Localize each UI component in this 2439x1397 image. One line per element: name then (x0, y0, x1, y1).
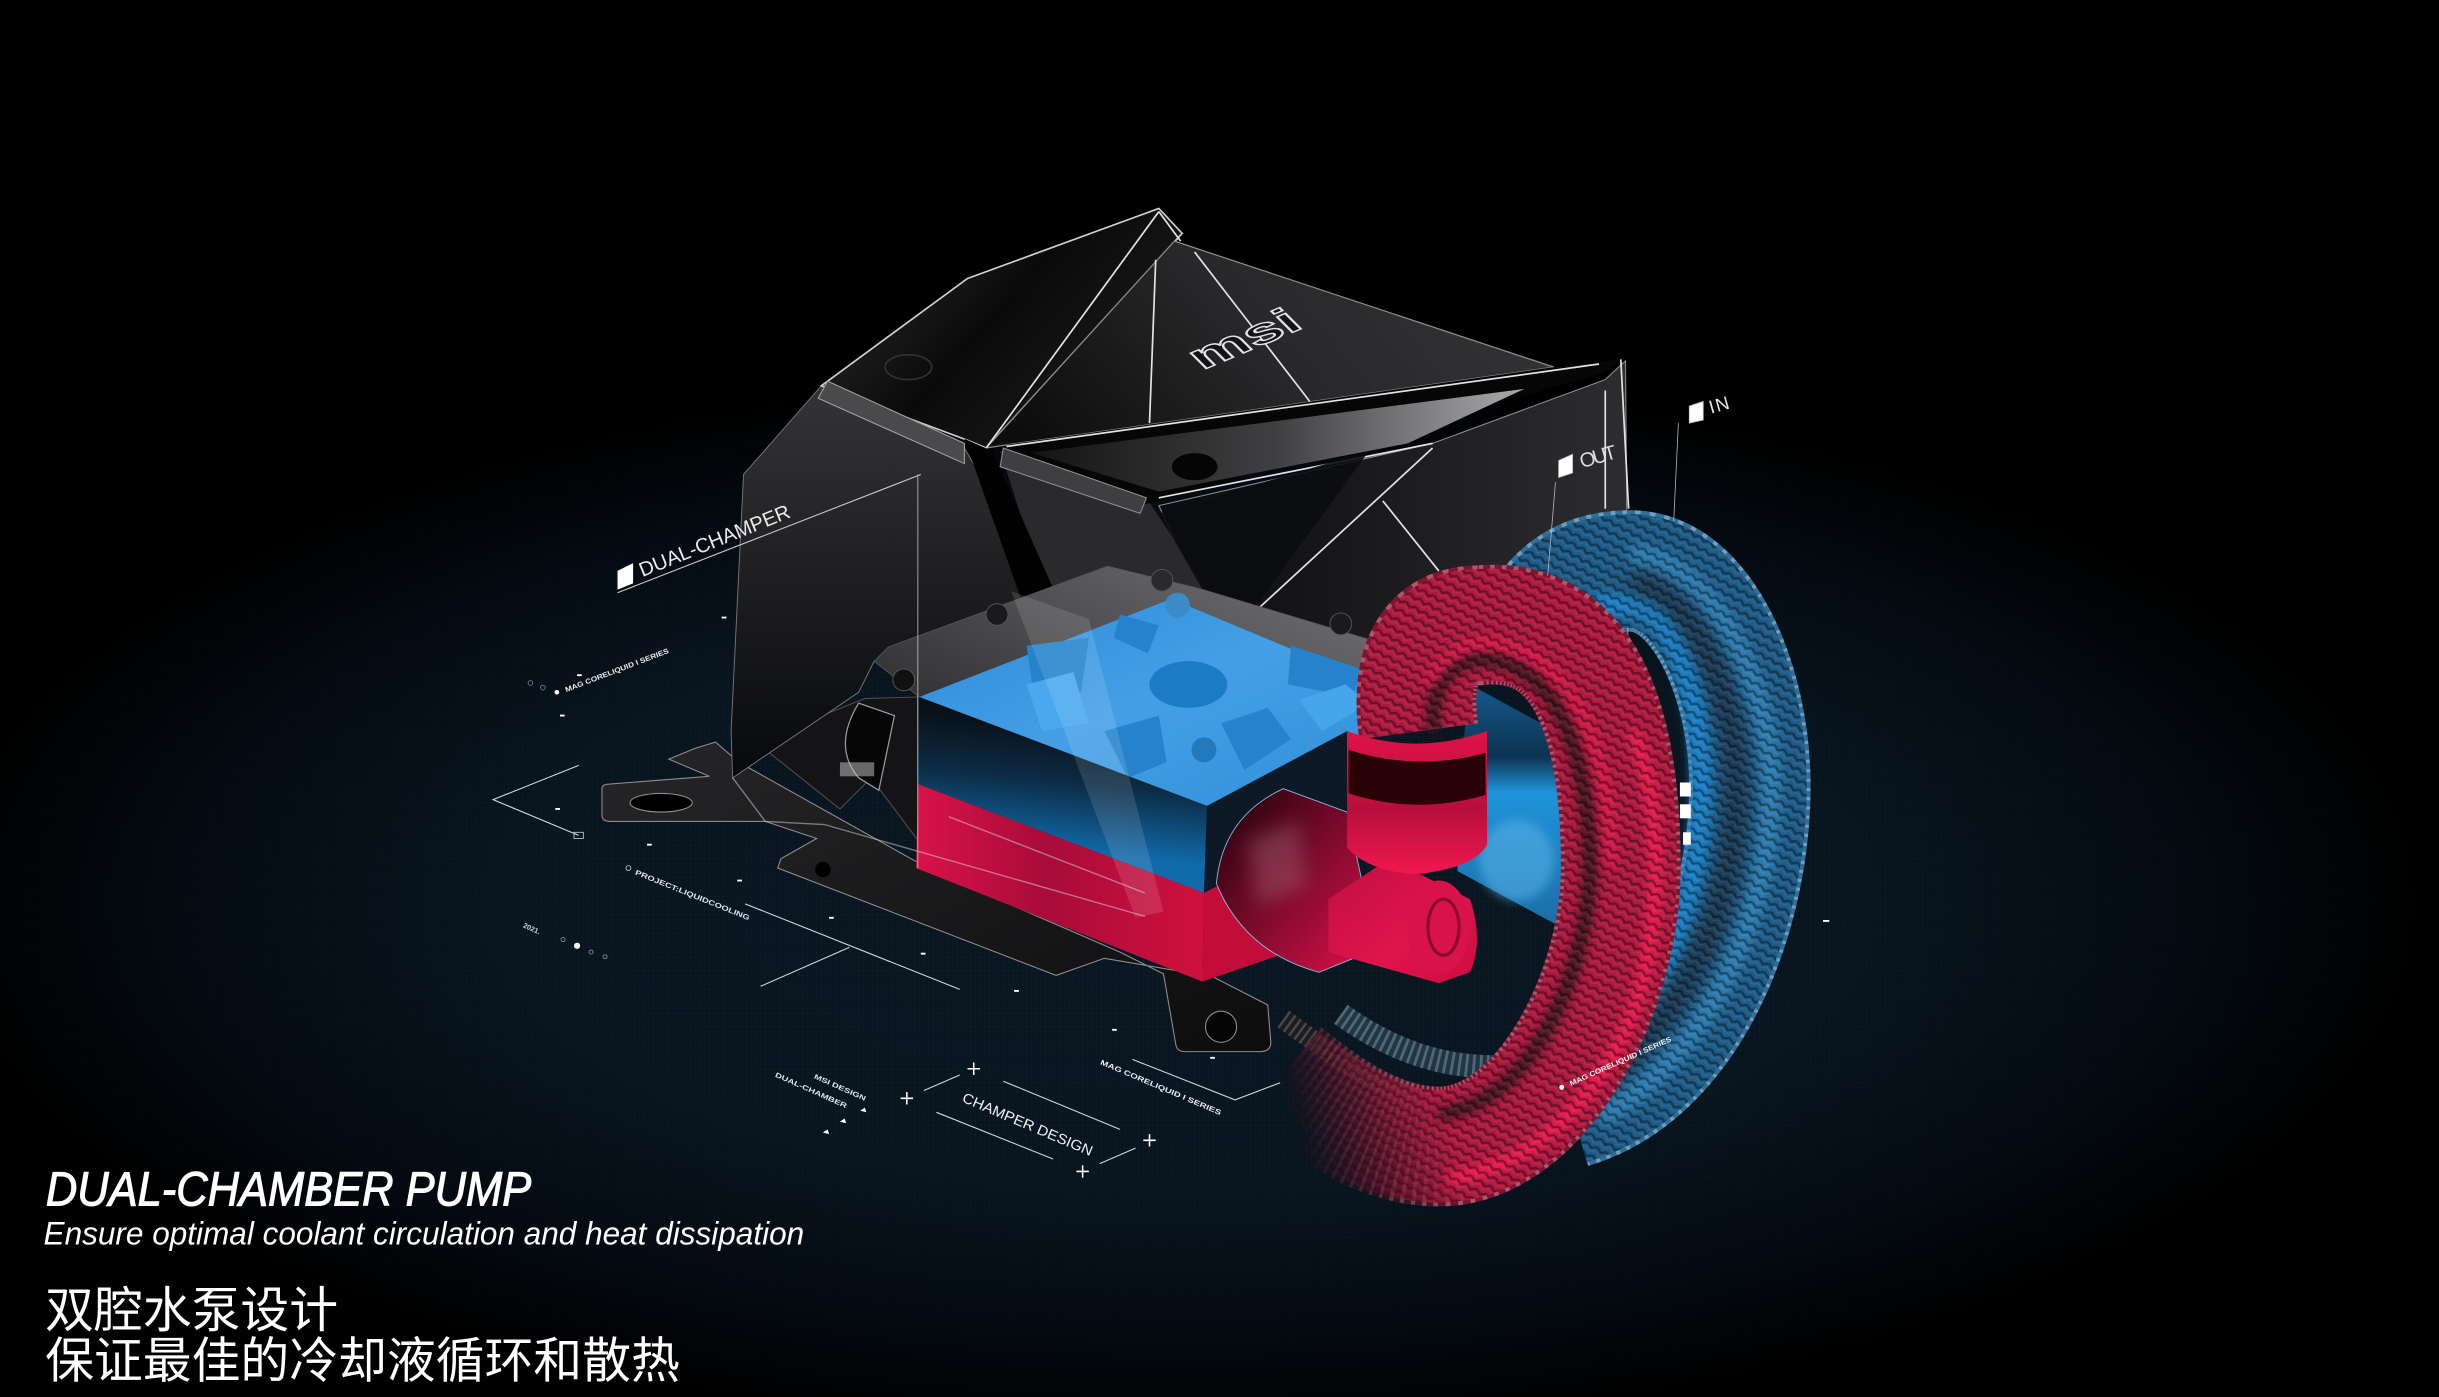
glass reflections over the block (1011, 591, 1164, 918)
glass housing (731, 208, 1629, 778)
right blue side (1204, 731, 1347, 893)
infographic canvas (38, 208, 2320, 1382)
small label: MAG CORELIQUID I SERIES right: MAG CORELIQUID I SERIES (1099, 1059, 1223, 1117)
reflection on cylinder (1247, 821, 1307, 905)
small label: 2021 with pager dots: 2021. (522, 922, 541, 936)
elbow body (1328, 859, 1477, 983)
msi top face (986, 241, 1554, 448)
red chamber side (916, 784, 1204, 982)
inner chassis and fan shadow (756, 697, 918, 840)
right red side (1202, 848, 1307, 982)
vertical collar (1347, 731, 1487, 874)
callout: IN (1674, 392, 1732, 521)
callout: OUT (1548, 442, 1619, 576)
dark interior window (1159, 451, 1369, 622)
blue chamber top (919, 599, 1369, 806)
pump cold plate (874, 566, 1369, 806)
small label over tube: MAG CORELIQUID I SERIES: MAG CORELIQUID I SERIES (1569, 1035, 1673, 1088)
blue fitting behind the loop (1457, 684, 1568, 924)
callout: OUT: OUT (1577, 442, 1619, 473)
black collar band (1349, 750, 1485, 805)
white tick bars behind the tube (1680, 783, 1691, 845)
Chinese heading lines: 保证最佳的冷却液循环和散热 (45, 1335, 680, 1389)
Chinese heading lines (45, 1284, 680, 1389)
red coolant tube (1283, 625, 1655, 1179)
front glass panel (1000, 451, 1229, 622)
blue chamber side (918, 697, 1207, 893)
top left face (821, 208, 1182, 448)
pump block (733, 474, 1369, 982)
small labels: MSI design and dual-chamber: MSI DESIGN (813, 1074, 867, 1103)
Chinese heading lines: 双腔水泵设计 (45, 1284, 338, 1338)
shiny top front face (1031, 389, 1524, 492)
callout: DUAL-CHAMPER (618, 474, 921, 593)
label: CHAMPER DESIGN: CHAMPER DESIGN (960, 1090, 1095, 1160)
blue coolant tube (1532, 554, 1770, 1117)
subheading: English description: Ensure optimal coolant circulation and heat dissipation (44, 1215, 804, 1252)
heading: DUAL-CHAMBER PUMP: DUAL-CHAMBER PUMP (46, 1163, 531, 1217)
mounting base plate (602, 742, 1271, 1052)
small labels: MSI design and dual-chamber: DUAL-CHAMBER (774, 1072, 848, 1110)
small label: PROJECT LIQUID COOLING: PROJECT:LIQUIDCOOLING (634, 869, 751, 922)
screw on top panel (1171, 453, 1218, 481)
small label: MAG CORELIQUID I SERIES left (528, 647, 670, 695)
lower left glass panel (731, 386, 1042, 778)
small label over tube: MAG CORELIQUID I SERIES (1559, 1035, 1673, 1090)
coolant pads on the blue top (1020, 593, 1369, 778)
central dark pillar (964, 439, 1058, 614)
callout: DUAL-CHAMPER: DUAL-CHAMPER (636, 501, 794, 582)
top front band (1006, 359, 1621, 504)
msi logo: msi (1177, 302, 1312, 377)
small label: MAG CORELIQUID I SERIES left: MAG CORELIQUID I SERIES (564, 647, 670, 694)
small labels: MSI design and dual-chamber (774, 1072, 867, 1134)
red elbow fitting (1216, 731, 1487, 983)
small label: 2021 with pager dots (522, 922, 607, 959)
tiny circle on left face (885, 355, 932, 380)
callout: IN: IN (1706, 392, 1732, 418)
ridged strips (818, 381, 964, 464)
small label: PROJECT LIQUID COOLING (626, 866, 751, 922)
background with blueprint grid (38, 433, 2320, 1382)
blueprint annotations (493, 618, 1829, 1178)
bright edge highlights (986, 212, 1629, 647)
thin braided tubes (1283, 1014, 1532, 1112)
horizontal outlet cylinder (1216, 789, 1377, 972)
right glass panel (1159, 361, 1629, 731)
